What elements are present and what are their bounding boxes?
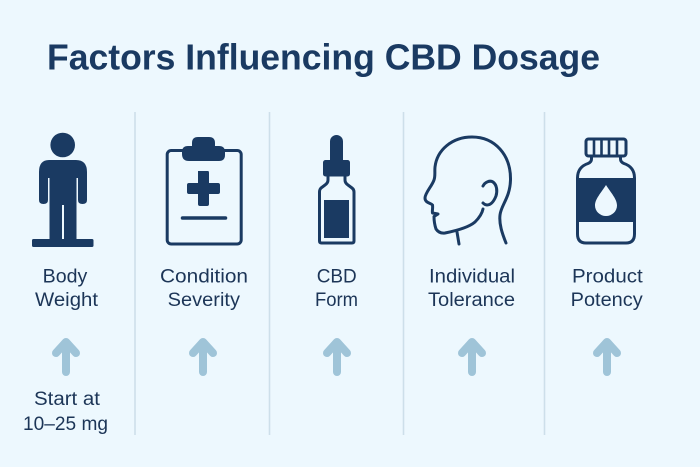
- column: CBD form: [315, 135, 358, 372]
- icon: clipboard: [167, 137, 241, 244]
- label: CBD form: [315, 267, 358, 311]
- label: condition severity: Condition: [160, 267, 248, 288]
- arrow: up: [56, 342, 76, 372]
- label: individual tolerance: Tolerance: [428, 290, 515, 311]
- label: CBD form: Form: [315, 290, 358, 311]
- label: product potency: Potency: [571, 290, 643, 311]
- icon: dropper bottle: [320, 135, 354, 243]
- label: individual tolerance: Individual: [429, 267, 515, 288]
- arrow: up: [462, 342, 482, 372]
- column: body weight: [23, 133, 108, 435]
- label: condition severity: [160, 267, 248, 311]
- icon: head profile: [425, 137, 511, 244]
- label: product potency: Product: [572, 267, 643, 288]
- label: CBD form: CBD: [317, 267, 357, 288]
- title: Factors Influencing CBD Dosage: [47, 36, 600, 78]
- label: condition severity: Severity: [168, 290, 241, 311]
- label: body weight: Weight: [35, 290, 99, 311]
- label: individual tolerance: [428, 267, 515, 311]
- note: starting dose: 10–25 mg: [23, 414, 108, 435]
- note: starting dose: Start at: [34, 389, 101, 410]
- arrow: up: [327, 342, 347, 372]
- arrow: up: [597, 342, 617, 372]
- label: body weight: [35, 267, 99, 311]
- column: individual tolerance: [425, 137, 515, 372]
- icon: bottle with drop: [576, 139, 636, 243]
- label: product potency: [571, 267, 643, 311]
- column: product potency: [571, 139, 643, 372]
- label: body weight: Body: [43, 267, 88, 288]
- note: starting dose: [23, 389, 108, 435]
- column: condition severity: [160, 137, 248, 372]
- icon: person: [32, 133, 94, 247]
- arrow: up: [193, 342, 213, 372]
